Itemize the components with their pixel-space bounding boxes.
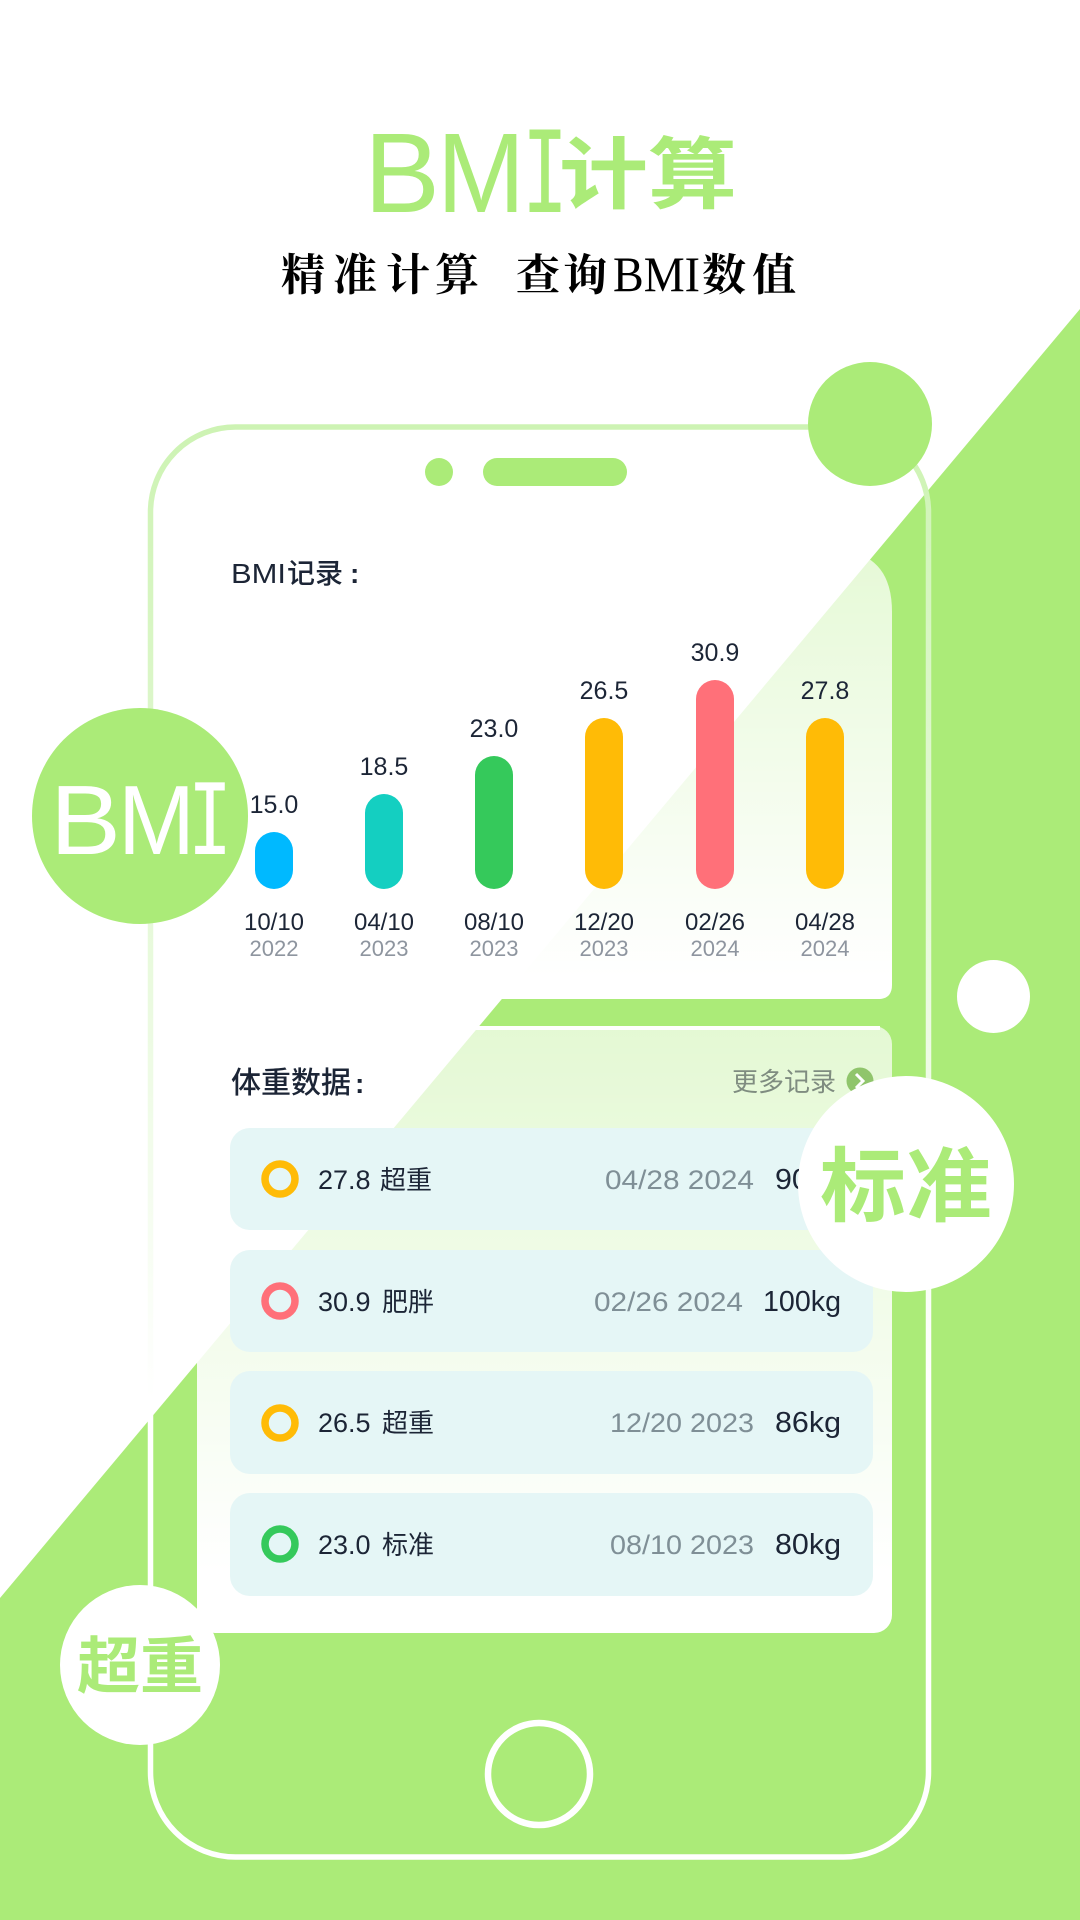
row: 30.9: 100kg — [763, 1286, 841, 1318]
decorative white circle — [957, 960, 1030, 1033]
decorative green circle — [808, 362, 932, 486]
row: 27.8: 27.8 — [318, 1165, 371, 1195]
badge: BMI: I — [188, 764, 232, 878]
heading: BMI record: : — [350, 558, 359, 589]
panel: weight data card — [197, 1026, 892, 1633]
badge: overweight: 超重 — [77, 1616, 203, 1706]
bar chart: 2023 — [580, 936, 628, 961]
badge: overweight — [60, 1585, 220, 1745]
heading: BMI record: BMI — [231, 558, 286, 589]
phone outline — [150, 427, 928, 1857]
title: 计算 — [559, 113, 737, 225]
row: 27.8: 90kg — [775, 1164, 841, 1196]
heading: BMI record: 记录 — [287, 552, 343, 592]
bar chart: 27.8 — [801, 677, 849, 705]
row: 30.9: 30.9 — [318, 1287, 371, 1317]
bar chart: 10/10 — [244, 909, 304, 936]
row: 27.8 — [230, 1128, 873, 1230]
bar chart: 04/10 — [354, 909, 414, 936]
row: 23.0 — [230, 1493, 873, 1596]
bar chart: 2023 — [470, 936, 518, 961]
bar chart: 08/10 — [464, 909, 524, 936]
title: M — [437, 110, 525, 236]
phone home button — [488, 1723, 590, 1825]
row: 23.0: 23.0 — [318, 1530, 371, 1560]
title — [364, 107, 737, 239]
heading: weight data: : — [355, 1068, 364, 1099]
bar chart: 02/26 — [685, 909, 745, 936]
bar chart: 2024 — [801, 936, 849, 961]
badge: BMI — [32, 708, 248, 924]
row: 26.5: 26.5 — [318, 1408, 371, 1438]
bar chart: 2024 — [691, 936, 739, 961]
subtitle continued: 数值 — [702, 239, 796, 303]
badge: BMI: B — [50, 765, 121, 875]
title: I — [522, 107, 568, 239]
badge: standard — [798, 1076, 1014, 1292]
bar chart: 15.0 — [250, 791, 298, 819]
subtitle: 精准计算查询 — [281, 239, 607, 303]
bar chart: 2022 — [250, 936, 298, 961]
heading: weight data: 体重数据 — [231, 1058, 351, 1102]
bar chart — [244, 639, 855, 961]
row: 30.9 — [230, 1250, 873, 1352]
heading: BMI record — [231, 552, 359, 592]
link: more records: 更多记录 — [732, 1062, 836, 1099]
bar chart: 04/28 — [795, 909, 855, 936]
row: 30.9: 肥胖 — [382, 1282, 434, 1319]
title: B — [364, 110, 440, 236]
phone speaker pill — [483, 458, 627, 486]
subtitle continued: BMI — [613, 246, 700, 302]
row: 27.8: 超重 — [380, 1160, 432, 1197]
bar chart: 18.5 — [360, 753, 408, 781]
row: 23.0: 标准 — [382, 1525, 434, 1562]
row: 26.5: 86kg — [775, 1407, 841, 1439]
row: 26.5 — [230, 1371, 873, 1474]
row: 23.0: 08/10 2023 — [610, 1530, 754, 1560]
phone sensor dot — [425, 458, 453, 486]
row: 26.5: 12/20 2023 — [610, 1408, 754, 1438]
bar chart: 2023 — [360, 936, 408, 961]
row: 30.9: 02/26 2024 — [594, 1287, 743, 1317]
panel: BMI record card — [196, 550, 892, 999]
badge: BMI: M — [118, 765, 195, 875]
bar chart: 30.9 — [691, 639, 739, 667]
row: 27.8: 04/28 2024 — [605, 1165, 754, 1195]
badge: standard: 标准 — [820, 1122, 992, 1239]
bar chart: 23.0 — [470, 715, 518, 743]
bar chart: 26.5 — [580, 677, 628, 705]
subtitle continued — [613, 239, 796, 303]
bar chart: 12/20 — [574, 909, 634, 936]
row: 23.0: 80kg — [775, 1529, 841, 1561]
row: 26.5: 超重 — [382, 1403, 434, 1440]
